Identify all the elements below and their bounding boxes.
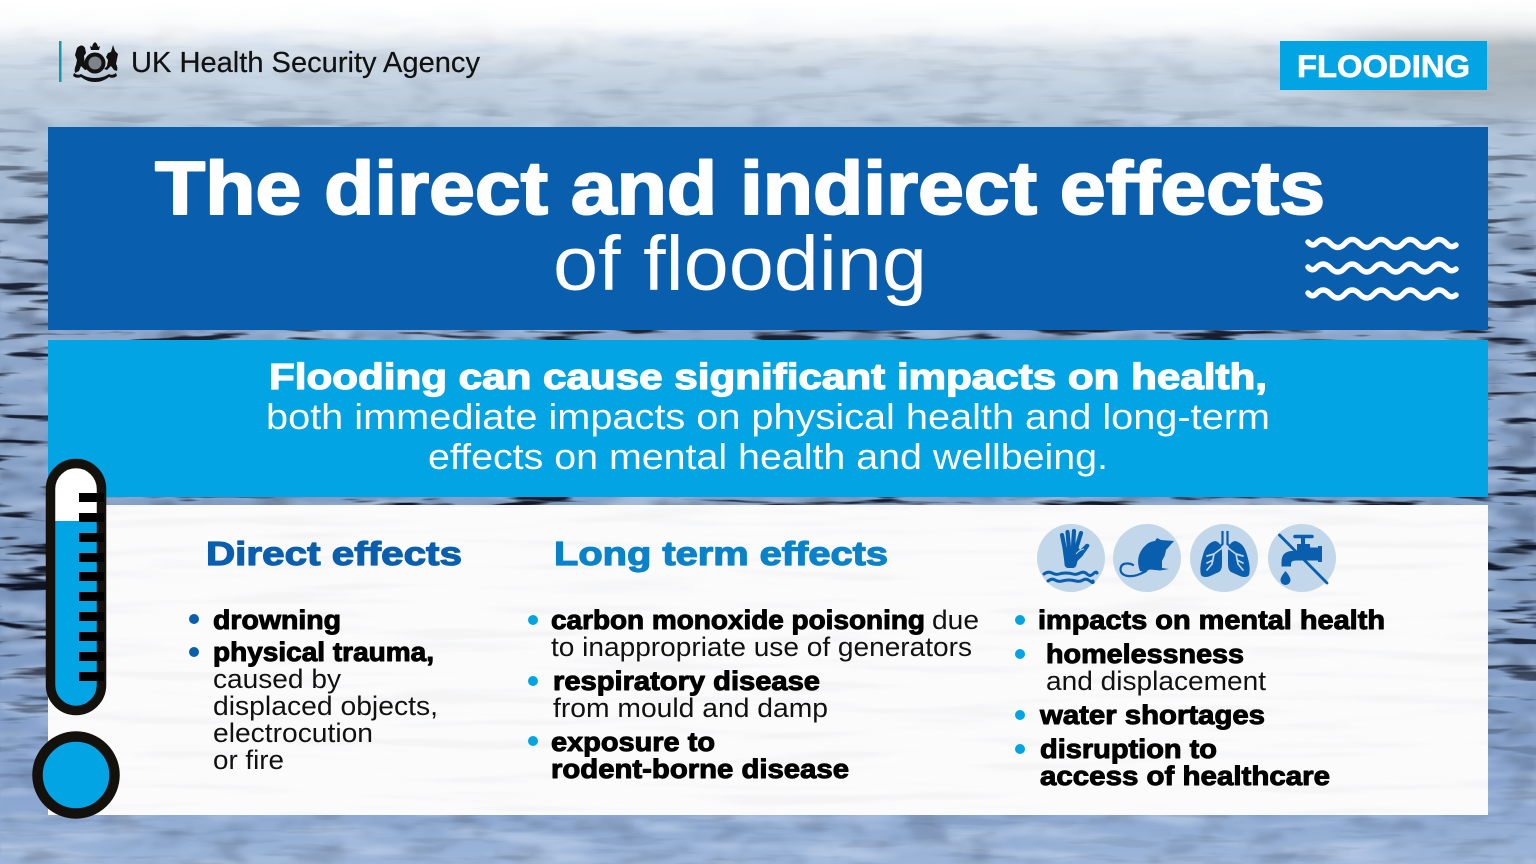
list: long term effects: to inappropriate use of generators	[551, 632, 972, 662]
list: further long term effects: water shortages	[1039, 700, 1265, 730]
list: long term effects: due	[932, 605, 979, 635]
tag: flooding	[1280, 41, 1487, 90]
icon: no water tap	[1268, 524, 1336, 592]
panel: effects	[48, 505, 1488, 815]
icon: thermometer	[38, 464, 114, 814]
heading: long term effects: Long term effects	[554, 536, 888, 573]
list: long term effects	[528, 605, 979, 784]
list: direct effects: displaced objects,	[213, 691, 438, 721]
list: long term effects: rodent-borne disease	[551, 754, 849, 784]
icon: rat	[1113, 524, 1181, 592]
icon: waves	[1308, 240, 1456, 298]
list: further long term effects	[1015, 605, 1385, 791]
list: direct effects: electrocution	[213, 718, 373, 748]
panel: title banner	[48, 127, 1488, 330]
list: further long term effects: and displacement	[1046, 666, 1267, 696]
panel: introduction: both immediate impacts on physical health and long-term	[266, 396, 1270, 437]
list: further long term effects: homelessness	[1046, 639, 1244, 669]
list: long term effects: carbon monoxide poisoning	[551, 605, 925, 635]
title: of flooding	[553, 221, 927, 307]
list: further long term effects: disruption to	[1040, 734, 1217, 764]
list: further long term effects: impacts on mental health	[1038, 605, 1385, 635]
tag: flooding: FLOODING	[1297, 48, 1470, 84]
list: long term effects: exposure to	[551, 727, 715, 757]
icon: lungs	[1190, 524, 1258, 592]
panel: introduction	[48, 340, 1488, 497]
list: further long term effects: access of healthcare	[1040, 761, 1330, 791]
title: The direct and indirect effects	[155, 146, 1325, 230]
panel: introduction: Flooding can cause significant impacts on health,	[269, 356, 1267, 397]
panel: introduction: effects on mental health and wellbeing.	[428, 436, 1108, 477]
list: direct effects: drowning	[213, 605, 341, 635]
list: long term effects: respiratory disease	[553, 666, 820, 696]
icon: drowning hand	[1037, 524, 1105, 592]
list: direct effects: or fire	[213, 745, 284, 775]
list: direct effects: caused by	[213, 664, 342, 694]
header logo: UK Health Security Agency	[59, 41, 480, 82]
list: direct effects	[189, 605, 438, 775]
title	[155, 146, 1325, 307]
heading: direct effects: Direct effects	[206, 536, 462, 573]
list: direct effects: physical trauma,	[213, 637, 434, 667]
header logo: UK Health Security Agency: UK Health Security Agency	[131, 47, 480, 79]
list: long term effects: from mould and damp	[553, 693, 828, 723]
icon: royal crest	[73, 42, 118, 82]
